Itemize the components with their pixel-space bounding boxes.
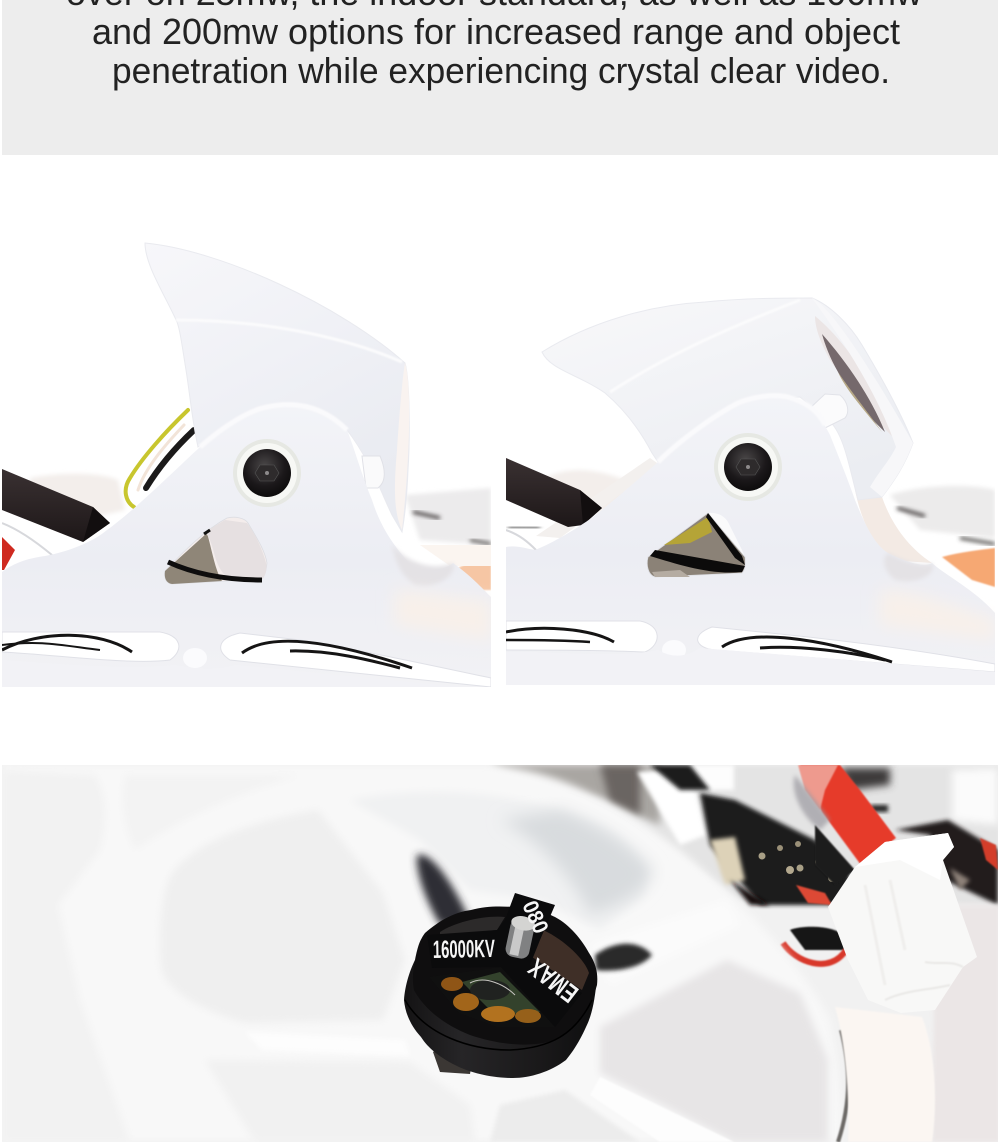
body side opening — [165, 517, 267, 584]
blurred background propeller guards — [2, 474, 491, 590]
black heat-shrink tube — [506, 458, 602, 527]
black heat-shrink tube — [2, 469, 110, 542]
right pinkish pane — [932, 905, 1000, 1142]
text panel: description — [2, 0, 998, 155]
corner pane top — [123, 775, 300, 850]
spoke highlight — [245, 1032, 410, 1056]
description text: penetration while experiencing crystal clear video. — [112, 50, 890, 91]
dark blurred propeller blade — [417, 854, 472, 925]
pane right top — [350, 792, 646, 930]
blurred electronics background — [490, 765, 1000, 1142]
lower guard with slots and wires — [2, 632, 491, 690]
motor label 16000KV: 16000KV — [433, 935, 495, 964]
motor mount nut — [433, 1046, 472, 1074]
spoke to bottom right — [646, 1100, 732, 1142]
motor label EMAX: EMAX — [522, 952, 584, 1009]
right side dark board — [895, 820, 998, 905]
spoke right — [590, 900, 740, 985]
canopy fin — [542, 298, 913, 500]
photo: canopy tilted down, right — [506, 298, 995, 685]
blurred dark motor in the distance — [595, 944, 652, 971]
inner pane left — [166, 816, 398, 1018]
pane right lower — [600, 960, 828, 1142]
camera lens window — [815, 316, 893, 437]
pale strut behind tube — [536, 458, 660, 538]
photo: canopy tilted up, left — [2, 242, 491, 687]
motor — [404, 893, 597, 1078]
motor bell arms — [427, 893, 582, 1027]
blurred background propeller guards — [508, 470, 995, 587]
red wire loop — [783, 927, 846, 964]
mounting screw — [714, 433, 782, 501]
mount body — [2, 405, 491, 687]
photo: brushless motor closeup — [2, 765, 1000, 1142]
mounting screw — [233, 439, 301, 507]
propeller guard outer — [246, 765, 824, 1142]
mount body — [506, 396, 995, 685]
motor side wall — [404, 953, 597, 1078]
recess behind mount — [855, 490, 932, 563]
canopy fin — [145, 243, 409, 532]
winding window — [429, 967, 555, 1027]
motor shaft — [504, 914, 536, 960]
rear window — [440, 917, 505, 936]
right window — [532, 930, 589, 990]
pane small bottom — [492, 1092, 631, 1140]
motor label 080: 080 — [517, 897, 554, 937]
outer pane left — [2, 770, 130, 1142]
body side opening — [647, 513, 745, 577]
flight controller board — [700, 793, 850, 905]
description text: and 200mw options for increased range and object — [92, 11, 900, 52]
metal screw edge — [838, 1030, 848, 1142]
white strut below connector — [835, 1007, 935, 1142]
thin white wire — [2, 523, 52, 555]
yellow, white and black wires — [126, 410, 194, 507]
red silicone wires — [794, 765, 896, 885]
white battery connector — [828, 833, 977, 1013]
description text — [66, 0, 923, 91]
thin white wire — [506, 530, 536, 550]
pane below spoke — [205, 1060, 475, 1142]
lower guard with slots and wires — [506, 620, 995, 672]
motor top rim — [413, 906, 597, 1045]
